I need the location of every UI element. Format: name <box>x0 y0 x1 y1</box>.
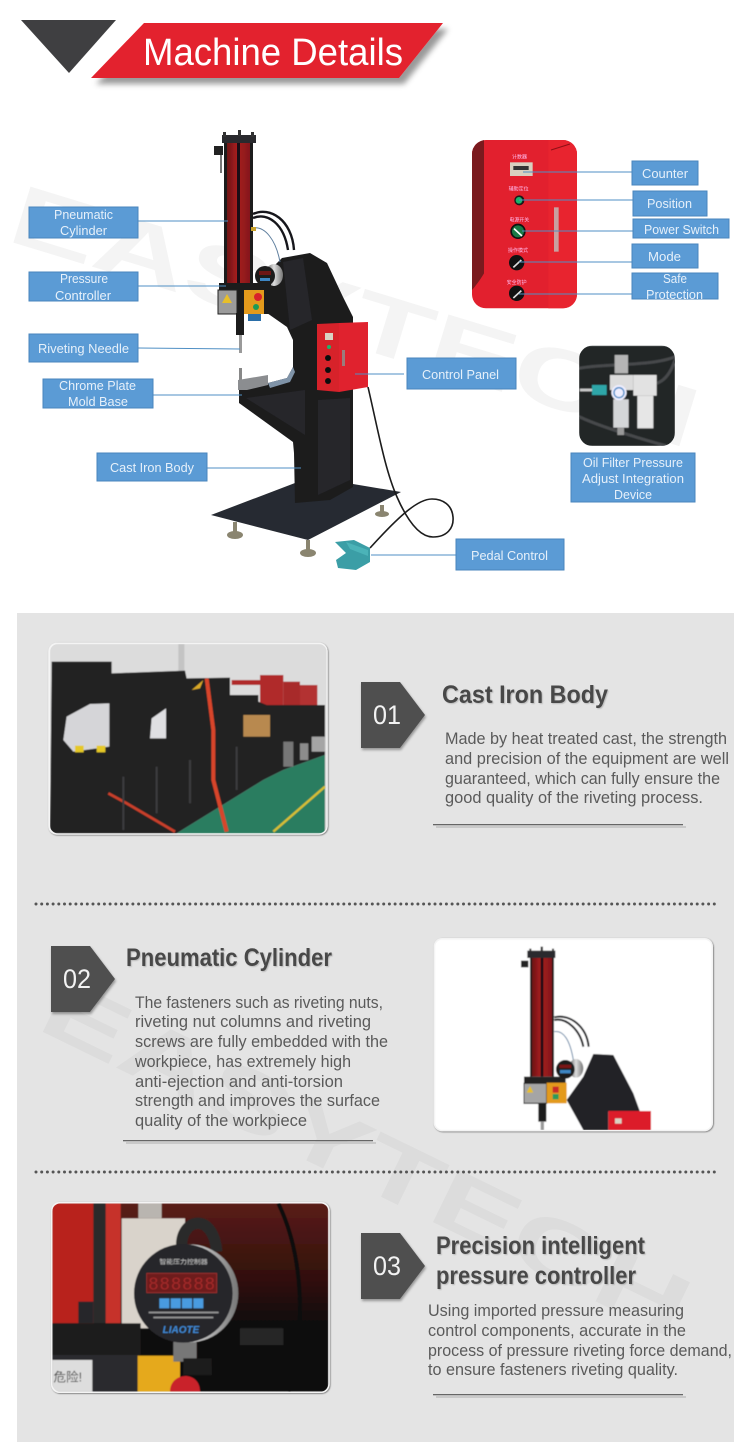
callout: Control Panel: Control Panel <box>422 367 499 382</box>
section 01 <box>48 643 729 835</box>
machine feet <box>227 505 389 557</box>
pedal <box>335 540 370 570</box>
callout: Pneumatic Cylinder: Pneumatic <box>54 207 113 222</box>
title banner <box>91 23 443 78</box>
section 03 <box>51 1202 732 1398</box>
body text 01: guaranteed, which can fully ensure the <box>445 770 720 788</box>
callout: Riveting Needle <box>29 334 240 362</box>
body text 01: and precision of the equipment are well <box>445 750 729 768</box>
body text 03: to ensure fasteners riveting quality. <box>428 1361 678 1379</box>
callout: Pedal Control: Pedal Control <box>471 548 548 563</box>
photo: pressure controller: 888888 <box>149 1274 215 1294</box>
callout: Oil Filter <box>571 453 695 502</box>
watermark: upper EASYTECH: EASYTECH <box>0 167 710 467</box>
callout: Control Panel <box>355 358 516 389</box>
body text 02: The fasteners such as riveting nuts, <box>135 994 383 1012</box>
photo: pressure controller: LIAOTE <box>163 1325 200 1336</box>
pressure gauge <box>255 264 283 286</box>
callout: Mode <box>519 244 698 268</box>
control panel box <box>317 322 368 392</box>
callout: Pneumatic Cylinder: Cylinder <box>60 223 108 238</box>
callout: Pedal Control <box>371 539 564 570</box>
callout: Oil Filter: Oil Filter Pressure <box>583 455 683 470</box>
machine illustration <box>211 130 453 570</box>
air line <box>253 228 280 262</box>
position lamp <box>509 186 529 205</box>
heading: Precision intelligent pressure controller: pressure controller <box>436 1262 636 1290</box>
callout: Counter <box>523 161 698 185</box>
callout: Power Switch: Power Switch <box>644 222 719 237</box>
callout: Counter: Counter <box>642 166 689 181</box>
body text 03: Using imported pressure measuring <box>428 1302 684 1320</box>
callout: Oil Filter: Device <box>614 487 652 502</box>
callout: Safe Protection <box>519 271 718 302</box>
body text 02: workpiece, has extremely high <box>134 1053 351 1071</box>
cast iron body <box>239 253 353 503</box>
callout: Pressure Controller: Controller <box>55 288 112 303</box>
body text 01 <box>445 730 729 807</box>
chrome plate mold base <box>238 368 268 390</box>
badge 01 <box>361 682 425 748</box>
badge 01: 01 <box>373 700 401 730</box>
callout: Chrome Plate Mold Base: Mold Base <box>68 394 128 409</box>
counter display <box>510 154 533 176</box>
mode switch: 操作模式 <box>508 247 528 254</box>
callout: Cast Iron Body <box>97 453 301 481</box>
callout: Pressure Controller: Pressure <box>60 271 108 286</box>
panel: feature details <box>17 613 734 1442</box>
watermark: lower EASYTECH: EASYTECH <box>27 960 706 1356</box>
callout: Safe Protection: Protection <box>646 287 703 302</box>
hoses <box>253 212 294 250</box>
throat highlight <box>268 367 295 388</box>
callout: Safe Protection: Safe <box>663 271 687 286</box>
icon: dark triangle <box>21 20 116 73</box>
badge 03 <box>361 1233 425 1299</box>
body shading <box>246 258 350 495</box>
body text 02 <box>134 994 388 1130</box>
control head <box>218 283 271 321</box>
body text 02: anti-ejection and anti-torsion <box>135 1073 343 1091</box>
section 02 <box>51 938 713 1144</box>
panel close-up image <box>472 140 577 308</box>
heading: Precision intelligent pressure controller: Precision intelligent <box>436 1232 646 1260</box>
oil filter image <box>579 346 675 446</box>
photo: cylinder close-up <box>434 938 713 1131</box>
body text 02: strength and improves the surface <box>135 1092 380 1110</box>
body text 01: Made by heat treated cast, the strength <box>445 730 727 748</box>
body text 02: screws are fully embedded with the <box>135 1033 388 1051</box>
callout: Mode: Mode <box>648 249 681 264</box>
photo: pressure controller: 危险! <box>53 1371 82 1385</box>
pneumatic cylinder <box>214 130 256 283</box>
callout: Chrome Plate Mold Base: Chrome Plate <box>59 378 136 393</box>
callout: Pressure Controller <box>29 271 226 303</box>
callout: Position <box>519 191 707 216</box>
heading: Cast Iron Body: Cast Iron Body <box>442 681 608 709</box>
photo: factory floor <box>48 643 328 835</box>
callout: Pneumatic Cylinder <box>29 207 228 238</box>
power switch <box>509 216 529 239</box>
photo: pressure controller: 智能压力控制器 <box>159 1258 208 1266</box>
callout: Position: Position <box>647 196 692 211</box>
badge 02: 02 <box>63 964 91 994</box>
body text 01: good quality of the riveting process. <box>445 789 703 807</box>
badge 02 <box>51 946 115 1012</box>
position lamp: 辅助定位 <box>509 186 529 193</box>
body text 03: process of pressure riveting force demand, <box>428 1342 732 1360</box>
heading: Pneumatic Cylinder: Pneumatic Cylinder <box>126 944 332 972</box>
callout: Oil Filter: Adjust Integration <box>582 471 684 486</box>
callout: Riveting Needle: Riveting Needle <box>38 341 129 356</box>
power switch: 电源开关 <box>509 216 529 223</box>
callout: Power Switch <box>522 219 729 238</box>
title: Machine Details <box>143 32 403 74</box>
body text 02: riveting nut columns and riveting <box>135 1013 371 1031</box>
body text 02: quality of the workpiece <box>135 1112 307 1130</box>
counter display: 计数器 <box>512 154 527 161</box>
header: Machine Details <box>21 20 443 78</box>
safe protection switch <box>507 279 527 301</box>
body text 03 <box>428 1302 732 1379</box>
callout: Chrome Plate Mold Base <box>43 378 242 409</box>
machine base plate <box>211 483 401 540</box>
photo: pressure controller <box>51 1202 330 1393</box>
safe protection switch: 安全防护 <box>507 279 527 286</box>
mode switch <box>508 247 528 270</box>
pedal cable <box>368 387 453 548</box>
badge 03: 03 <box>373 1251 401 1281</box>
callout: Cast Iron Body: Cast Iron Body <box>110 460 194 475</box>
body text 03: control components, accurate in the <box>428 1322 686 1340</box>
heading: Precision intelligent pressure controller <box>436 1232 646 1290</box>
riveting needle <box>236 313 244 353</box>
